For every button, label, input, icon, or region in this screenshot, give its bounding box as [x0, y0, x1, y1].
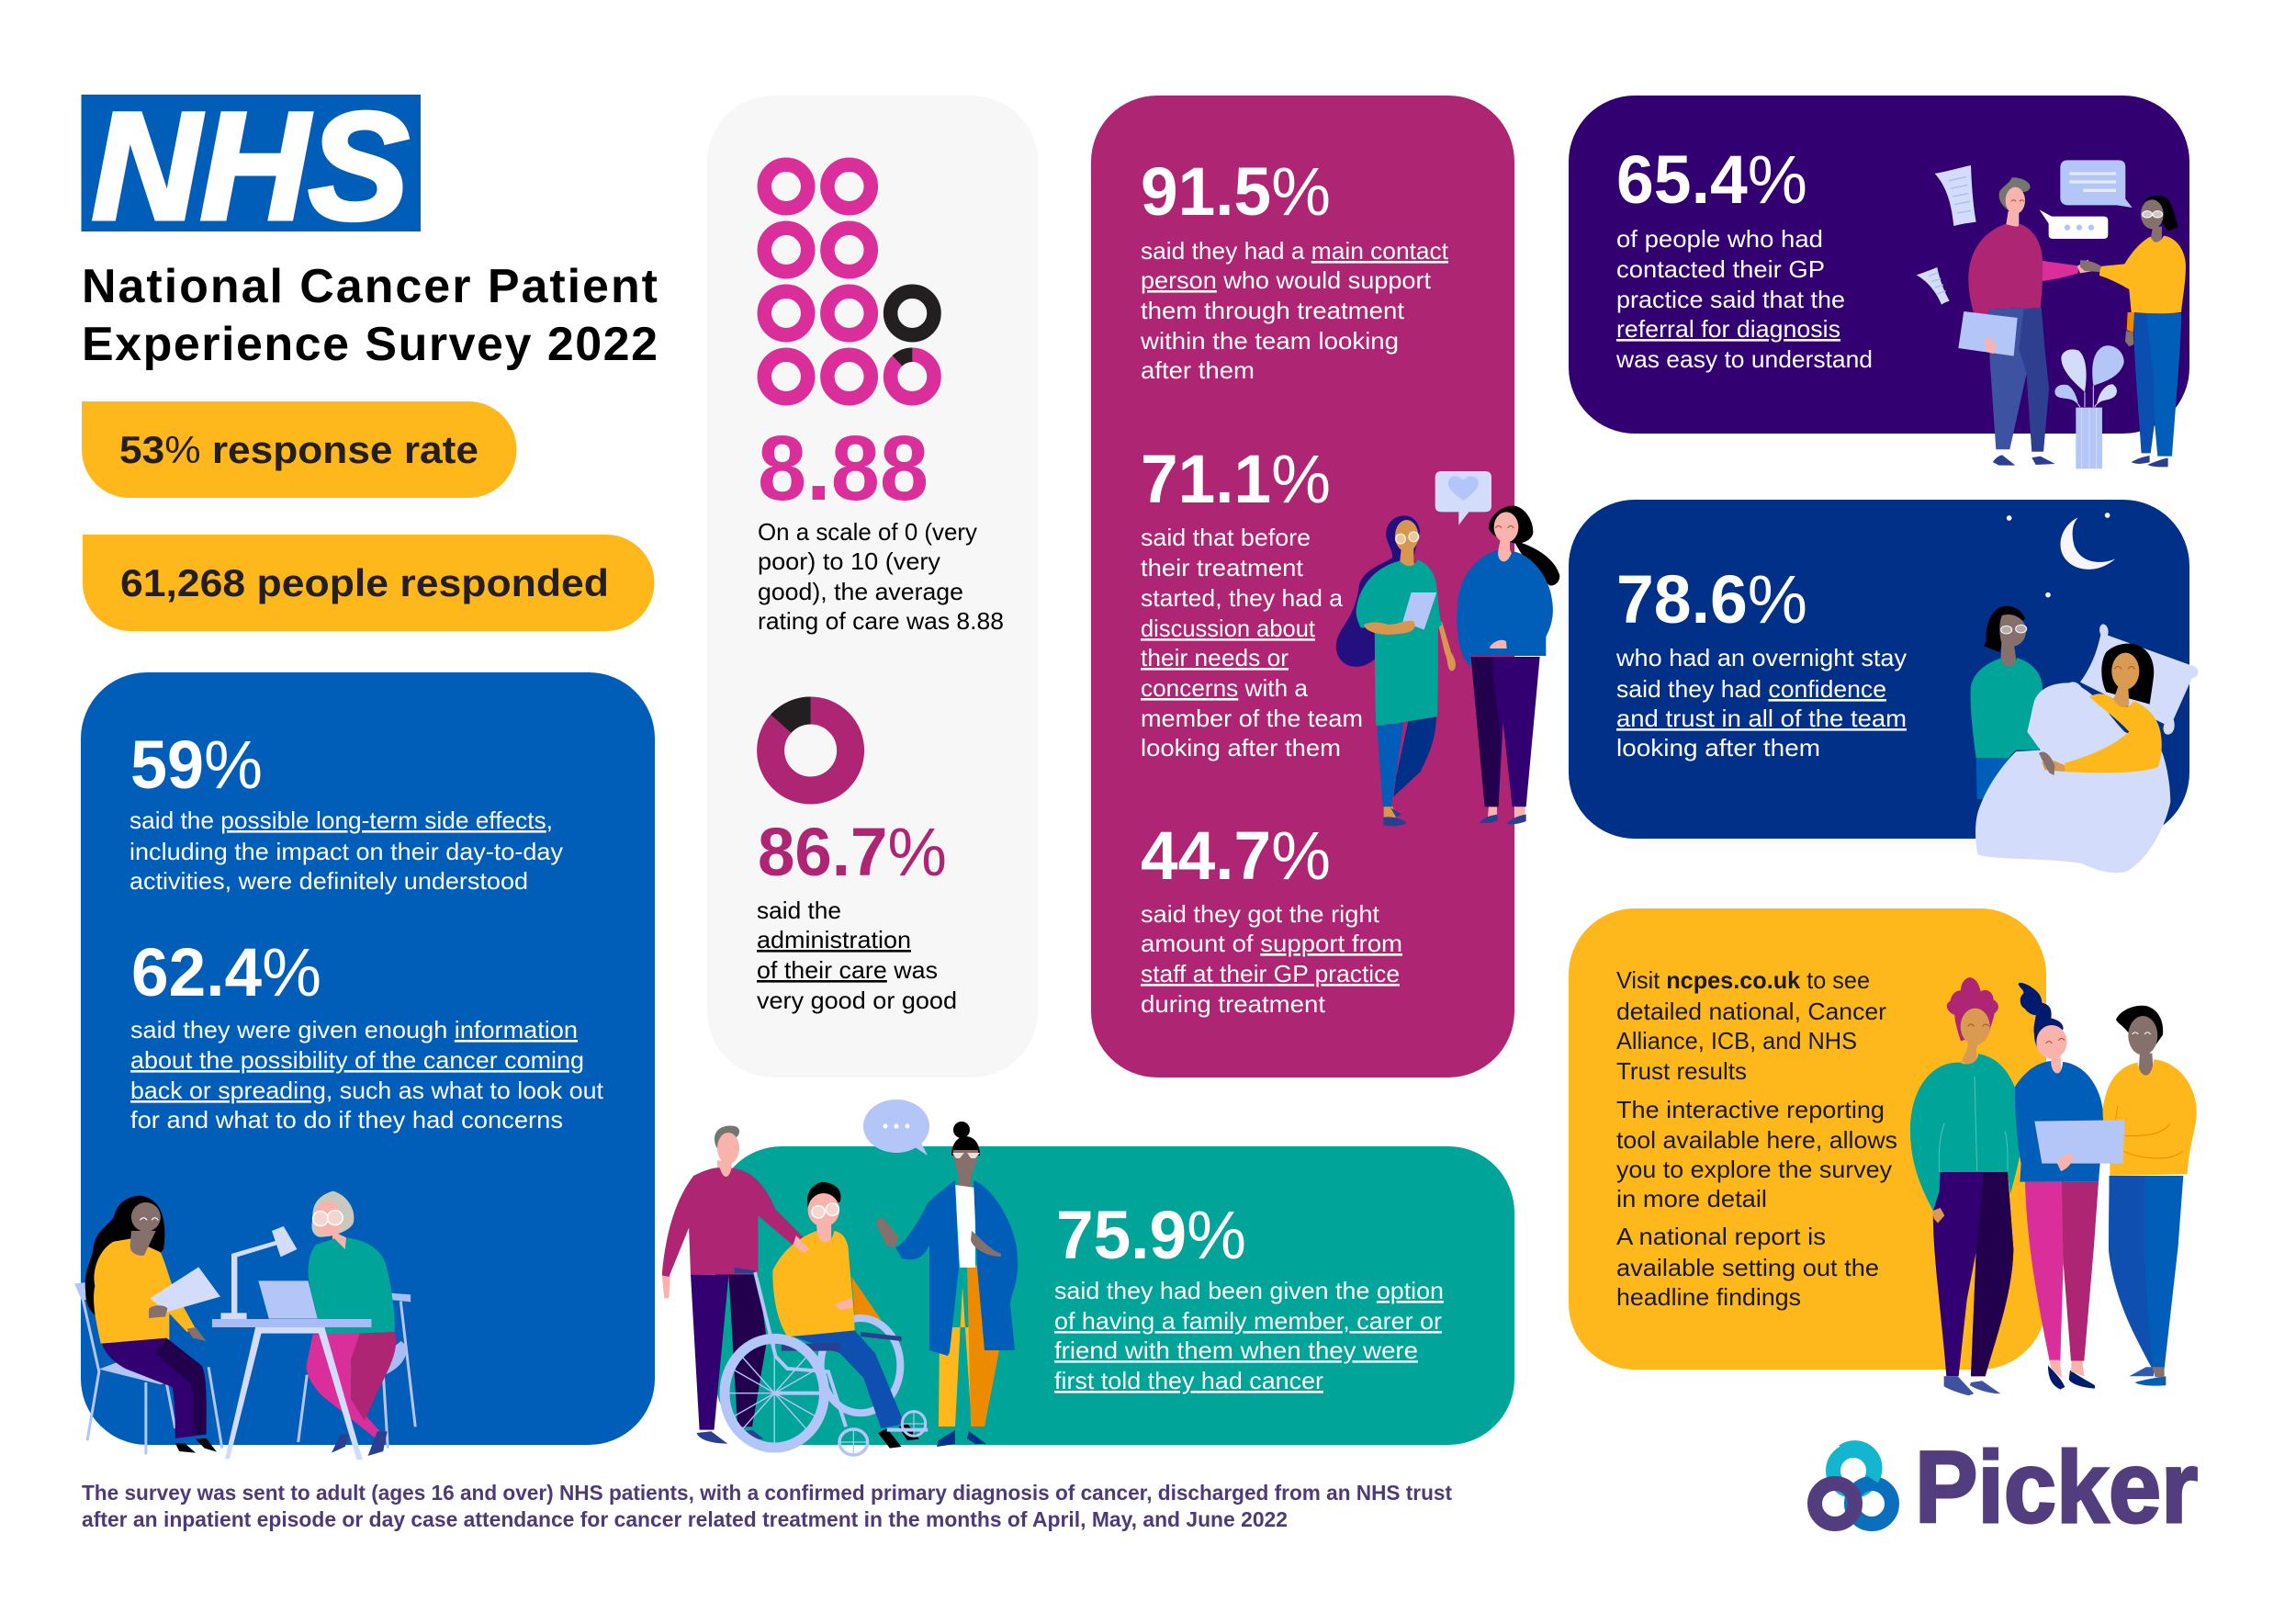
illustration: handshake: [1917, 160, 2186, 468]
stat: 71.1%: [1141, 441, 1363, 761]
stat: 59%: [129, 727, 563, 895]
illustration: two women at a desk: [74, 1191, 415, 1460]
Picker logo: Picker: [1915, 1431, 2198, 1544]
panel: teal family member: [715, 1146, 1514, 1445]
text: reporting tool: [1616, 1096, 1897, 1212]
text: national results: Trust results: [1616, 1057, 1747, 1085]
stat: 86.7%: very good or good: [757, 987, 957, 1014]
stat: 65.4%: contacted their GP: [1616, 255, 1825, 283]
stat: 71.1%: said that before: [1141, 524, 1311, 551]
stat: 62.4%: back or spreading, such as what to look out: [130, 1077, 604, 1104]
stat: 75.9%: 75.9%: [1056, 1197, 1246, 1273]
stat: 8.88: good), the average: [758, 578, 963, 605]
stat: 75.9%: friend with them when they were: [1054, 1336, 1418, 1364]
stat: 59%: activities, were definitely understood: [129, 867, 528, 895]
stat: 78.6%: 78.6%: [1616, 561, 1807, 637]
stat: 91.5%: [1140, 153, 1449, 384]
panel: blue side effects: [81, 672, 655, 1445]
stat: 75.9%: first told they had cancer: [1054, 1367, 1323, 1394]
illustration: man and wheelchair user: [662, 1160, 928, 1455]
callout: response rate: 53% response rate: [119, 428, 478, 471]
stat: 71.1%: discussion about: [1141, 615, 1316, 642]
panel: navy: [1569, 500, 2189, 839]
text: national results: Alliance, ICB, and NHS: [1616, 1027, 1857, 1054]
stat: 75.9%: said they had been given the option: [1054, 1277, 1444, 1304]
rating rings: [764, 164, 934, 399]
stat: 71.1%: looking after them: [1141, 734, 1341, 761]
stat: 78.6%: looking after them: [1616, 734, 1820, 761]
stat: 91.5%: said they had a main contact: [1141, 237, 1449, 265]
stat: 65.4%: of people who had: [1616, 225, 1823, 253]
text: reporting tool: The interactive reporting: [1616, 1096, 1885, 1123]
callout: response rate: [82, 401, 516, 498]
stat: 8.88: poor) to 10 (very: [758, 547, 940, 575]
text: national report: available setting out the: [1616, 1254, 1879, 1281]
stat: 75.9%: [1054, 1197, 1444, 1394]
stat: 78.6%: said they had confidence: [1616, 675, 1886, 703]
speech bubble: [863, 1100, 929, 1156]
stat: 44.7%: amount of support from: [1141, 930, 1402, 957]
stat: 91.5%: 91.5%: [1141, 153, 1331, 230]
text: national results: [1616, 966, 1886, 1085]
stat: 91.5%: within the team looking: [1140, 327, 1399, 355]
stat: 44.7%: said they got the right: [1141, 900, 1380, 928]
panel: purple: [1569, 96, 2189, 434]
text: national results: detailed national, Cancer: [1616, 998, 1886, 1025]
panel: grey ratings: [707, 96, 1038, 1077]
stat: 75.9%: of having a family member, carer or: [1054, 1307, 1442, 1335]
stat: 62.4%: [130, 934, 604, 1133]
footnote: [82, 1481, 1452, 1531]
stat: 65.4%: referral for diagnosis: [1616, 315, 1840, 343]
illustration: three people with tablet: [1910, 977, 2197, 1395]
panel: magenta: [1091, 96, 1514, 1077]
stat: 91.5%: them through treatment: [1141, 297, 1405, 324]
text: reporting tool: tool available here, allows: [1616, 1126, 1897, 1154]
stat: 62.4%: said they were given enough information: [130, 1016, 578, 1043]
stat: 86.7%: [757, 814, 957, 1014]
title: [82, 260, 658, 371]
stat: 62.4%: 62.4%: [131, 934, 321, 1010]
stat: 86.7%: of their care was: [757, 956, 938, 984]
donut chart: 86.7%: [771, 711, 850, 790]
callout: people responded: 61,268 people responded: [120, 561, 609, 604]
stat: 59%: 59%: [130, 727, 263, 803]
text: reporting tool: in more detail: [1616, 1185, 1767, 1212]
stat: 65.4%: [1615, 141, 1873, 373]
text: national report: [1616, 1223, 1879, 1311]
title: Experience Survey 2022: [82, 318, 658, 371]
stat: 78.6%: [1615, 561, 1907, 761]
illustration: patient in bed at night: [1971, 513, 2198, 873]
callout: people responded: [83, 535, 655, 631]
stat: 71.1%: concerns with a: [1141, 674, 1309, 702]
title: National Cancer Patient: [82, 260, 658, 313]
text: national report: headline findings: [1616, 1283, 1801, 1311]
stat: 62.4%: for and what to do if they had concerns: [130, 1106, 563, 1133]
stat: 71.1%: 71.1%: [1141, 441, 1331, 517]
stat: 44.7%: [1141, 818, 1402, 1018]
stat: 44.7%: during treatment: [1141, 990, 1326, 1018]
text: national report: A national report is: [1616, 1223, 1826, 1250]
stat: 71.1%: their treatment: [1141, 554, 1304, 581]
stat: 59%: including the impact on their day-to-day: [129, 838, 563, 865]
footnote: The survey was sent to adult (ages 16 and over) NHS patients, with a confirmed primary diagnosis of cancer, discharged from an NHS trust: [82, 1481, 1452, 1505]
man head: [715, 1126, 739, 1164]
illustration: wheelchair group: [715, 1100, 1018, 1447]
stat: 86.7%: 86.7%: [758, 814, 947, 890]
NHS logo: NHS: [92, 82, 409, 252]
stat: 71.1%: their needs or: [1141, 644, 1289, 671]
stat: 78.6%: who had an overnight stay: [1615, 644, 1907, 671]
stat: 44.7%: staff at their GP practice: [1141, 960, 1400, 987]
stat: 86.7%: said the: [757, 897, 841, 924]
stat: 86.7%: administration: [757, 926, 911, 953]
stat: 8.88: [758, 417, 1004, 635]
stat: 65.4%: 65.4%: [1616, 141, 1807, 218]
illustration: two women with speech bubble: [1336, 471, 1559, 826]
text: reporting tool: you to explore the survey: [1616, 1156, 1892, 1183]
stat: 44.7%: 44.7%: [1141, 818, 1331, 894]
footnote: after an inpatient episode or day case attendance for cancer related treatment in the months of April, May, and June 2022: [82, 1507, 1288, 1531]
stat: 78.6%: and trust in all of the team: [1616, 705, 1907, 732]
stat: 71.1%: member of the team: [1141, 705, 1363, 732]
stat: 65.4%: practice said that the: [1616, 286, 1845, 313]
stat: 71.1%: started, they had a: [1141, 584, 1344, 612]
panel: yellow further information: [1569, 908, 2046, 1370]
stat: 8.88: On a scale of 0 (very: [758, 518, 977, 546]
stat: 8.88: 8.88: [758, 417, 929, 520]
stat: 65.4%: was easy to understand: [1615, 345, 1873, 373]
text: national results: Visit ncpes.co.uk to see: [1616, 966, 1870, 994]
stat: 91.5%: after them: [1141, 356, 1255, 384]
stat: 62.4%: about the possibility of the cancer coming: [130, 1046, 584, 1074]
stat: 91.5%: person who would support: [1141, 266, 1432, 294]
stat: 8.88: rating of care was 8.88: [758, 607, 1004, 635]
stat: 59%: said the possible long-term side effects,: [129, 806, 553, 834]
carer in blue coat: [875, 1122, 1018, 1447]
